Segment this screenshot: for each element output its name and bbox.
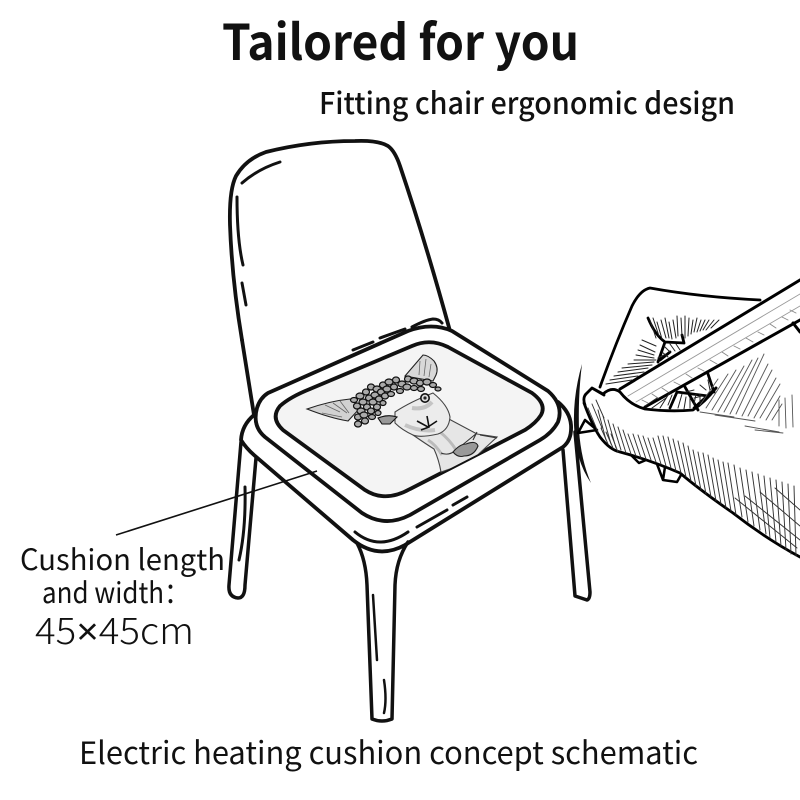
hatching: palm [700,354,793,433]
front leg [357,542,408,721]
subtitle: Fitting chair ergonomic design [319,79,735,123]
pen [578,280,800,433]
right ear [405,355,437,381]
hatching: back of hand [606,316,719,409]
caption: Electric heating cushion concept schematic [79,728,698,773]
left ear [307,399,361,421]
neck [413,418,497,472]
callout: cushion size: and width： [42,570,190,612]
right rear leg [563,432,590,600]
hatching: thumb underside [588,400,800,556]
collar [441,432,497,454]
fingers [632,456,681,482]
illustration: hand holding pen [574,280,800,557]
callout: cushion size [20,537,225,655]
cushion picture: deer sketch [276,342,543,496]
thumb outline [584,388,800,557]
illustration: chair with cushion [229,141,590,721]
nose and mouth [417,416,437,430]
brush stroke [574,364,591,483]
seat base [241,402,571,551]
cushion panel [276,342,543,496]
chair back [230,141,450,415]
palm creases [648,318,716,410]
left rear leg [229,442,256,598]
title: Tailored for you [222,4,579,75]
cushion outer ring [256,326,560,521]
flower crown [350,376,441,427]
face [395,393,450,436]
deer [307,355,497,472]
callout: cushion size: Cushion length [20,537,225,579]
callout: cushion size: 45×45cm [35,601,194,655]
lower eye [378,416,397,424]
hand back outline [600,288,760,387]
eye [421,394,429,402]
callout leader line [116,471,317,535]
